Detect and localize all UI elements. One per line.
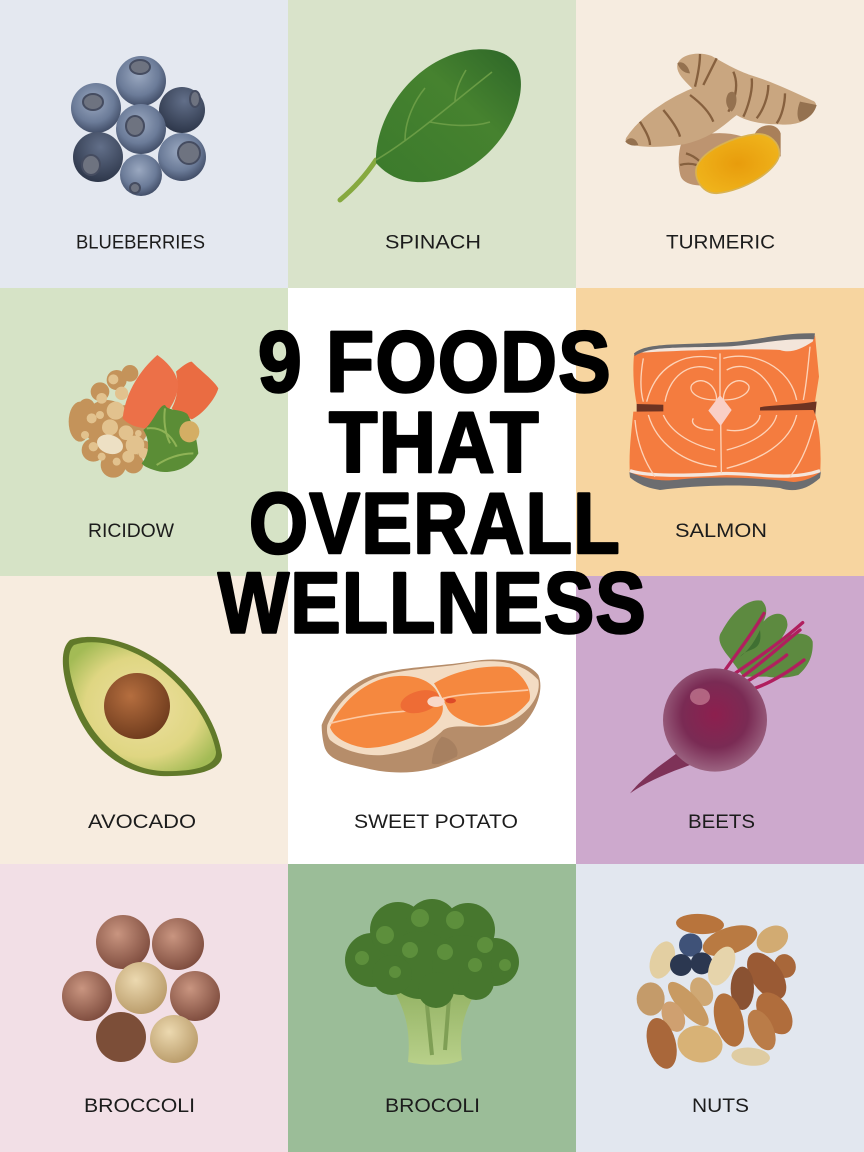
label: beets: BEETS bbox=[688, 811, 755, 833]
label: brocoli: BROCOLI bbox=[385, 1095, 480, 1117]
label: nuts: NUTS bbox=[692, 1095, 749, 1117]
icon: avocado half bbox=[63, 637, 222, 776]
label: avocado: AVOCADO bbox=[88, 811, 196, 833]
panel: center white bbox=[288, 288, 576, 864]
label: broccoli: BROCCOLI bbox=[84, 1095, 195, 1117]
icon: salmon fillets bbox=[629, 333, 821, 490]
icon: broccoli bbox=[345, 899, 519, 1065]
label: spinach: SPINACH bbox=[385, 232, 481, 254]
panel: salmon bbox=[576, 288, 864, 576]
icon: mixed nuts bbox=[637, 913, 800, 1072]
panel: beets bbox=[576, 576, 864, 864]
title: THAT bbox=[329, 395, 540, 491]
label: salmon: SALMON bbox=[675, 520, 767, 542]
panel: sweet potato bbox=[322, 659, 540, 833]
icon: beet bbox=[630, 600, 813, 793]
panel: ricidow bbox=[0, 288, 288, 576]
panel: broccoli (round nuts) bbox=[0, 864, 288, 1152]
icon: spinach leaf bbox=[340, 49, 521, 200]
icon: blueberries bbox=[71, 56, 206, 196]
icon: grain and salmon mix bbox=[69, 355, 218, 478]
title bbox=[218, 314, 647, 652]
panel: avocado bbox=[0, 576, 288, 864]
title: 9 FOODS bbox=[258, 314, 612, 410]
label: ricidow: RICIDOW bbox=[88, 520, 174, 542]
label: blueberries: BLUEBERRIES bbox=[76, 232, 205, 254]
panel: brocoli bbox=[288, 864, 576, 1152]
title: WELLNESS bbox=[218, 556, 647, 652]
panel: turmeric bbox=[576, 0, 864, 288]
panel: nuts bbox=[576, 864, 864, 1152]
icon: sweet potato half bbox=[322, 659, 540, 772]
panel: blueberries bbox=[0, 0, 288, 288]
label: turmeric: TURMERIC bbox=[666, 232, 775, 254]
panel: spinach bbox=[288, 0, 576, 288]
icon: round nuts bbox=[62, 915, 220, 1063]
title: OVERALL bbox=[249, 476, 621, 572]
label: sweet potato: SWEET POTATO bbox=[354, 811, 518, 833]
icon: turmeric root bbox=[625, 54, 817, 193]
